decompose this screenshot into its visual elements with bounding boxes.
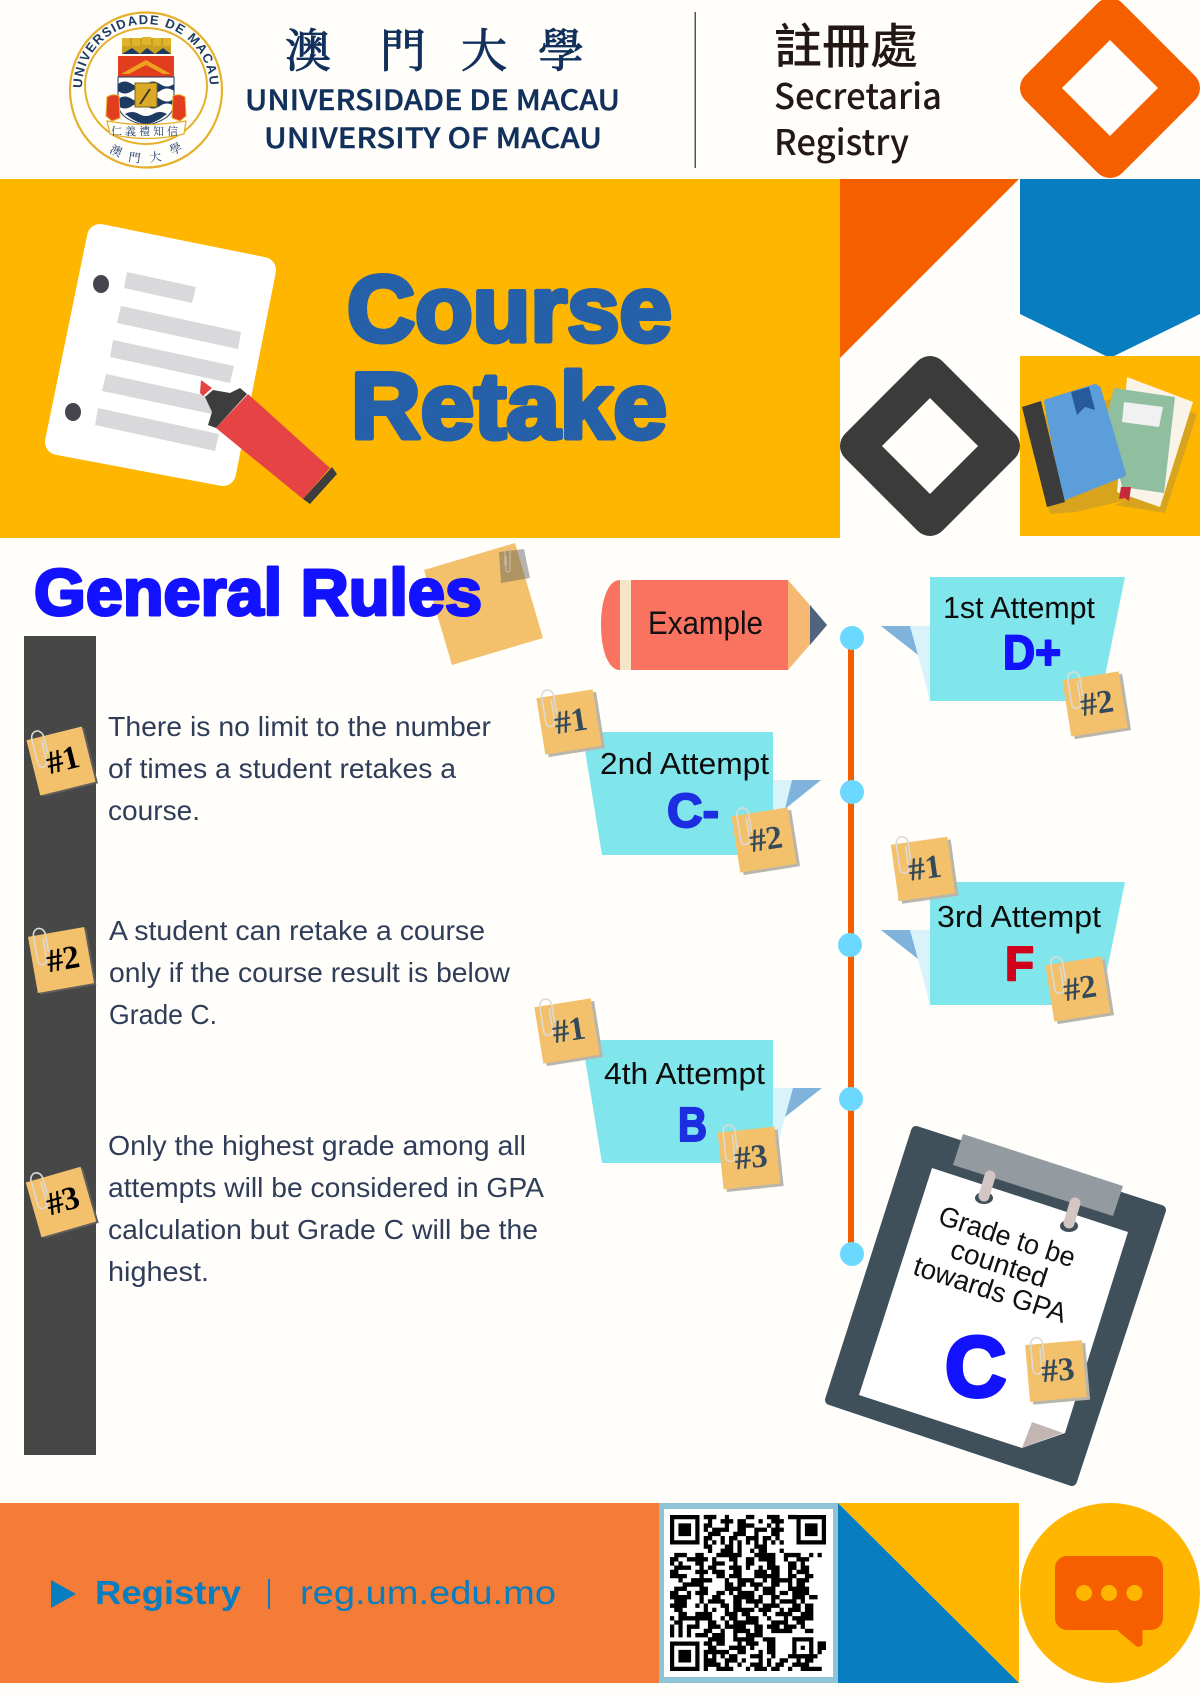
- university logo: 大: [148, 148, 162, 165]
- rule 2 text: [109, 915, 511, 1030]
- university logo: UNIVERSIDADE DE MACAU: [73, 15, 219, 88]
- rule 2 text: A student can retake a course: [109, 915, 485, 946]
- note #1: #1: [906, 849, 944, 889]
- registry chinese: 註冊處: [774, 7, 918, 77]
- registry label: Registry: [95, 1574, 242, 1611]
- document illustration: [58, 237, 337, 504]
- icon: highlighter marker: [200, 380, 337, 504]
- rule 3 text: [108, 1130, 544, 1287]
- card: 2nd attempt: 2nd Attempt: [600, 746, 769, 781]
- card: 1st attempt: D+: [1003, 627, 1061, 680]
- panel: general rules: [24, 543, 544, 1455]
- note #2: [1061, 665, 1131, 740]
- clipboard text: [910, 1200, 1079, 1329]
- footer: [0, 1503, 1200, 1683]
- icon: play arrow: [51, 1580, 76, 1608]
- note #3: [1025, 1333, 1090, 1405]
- university name english: UNIVERSITY OF MACAU: [264, 117, 602, 157]
- university name portuguese: UNIVERSIDADE DE MACAU: [245, 79, 620, 119]
- hero banner: [0, 179, 840, 538]
- note #1: [890, 830, 959, 904]
- rule 1 text: of times a student retakes a: [108, 753, 456, 784]
- card: 1st attempt: 1st Attempt: [943, 590, 1095, 625]
- panel: example timeline: [533, 577, 1161, 1481]
- card: 3rd attempt: 3rd Attempt: [937, 899, 1101, 934]
- title: Course Retake: Course: [347, 256, 672, 361]
- card: 3rd attempt: [881, 830, 1125, 1025]
- rule 2 text: only if the course result is below: [109, 957, 511, 988]
- card: 4th attempt: B: [678, 1099, 707, 1152]
- pencil: example: [601, 580, 827, 670]
- orange diamond: [1037, 15, 1183, 161]
- rule 1 note: [25, 720, 98, 797]
- university logo: 門: [128, 150, 141, 166]
- icon: chat bubble: [1020, 1503, 1200, 1683]
- card: 2nd attempt: C-: [667, 785, 719, 838]
- note #1: [533, 992, 603, 1067]
- note #2: #2: [1061, 968, 1099, 1009]
- title: Course Retake: Retake: [351, 353, 667, 458]
- secretaria: Secretaria: [774, 69, 942, 120]
- rule 3 text: calculation but Grade C will be the: [108, 1214, 538, 1245]
- note #1: #1: [552, 701, 590, 742]
- rule 3 text: highest.: [108, 1256, 209, 1287]
- footer orange bar: [0, 1503, 659, 1683]
- header: [68, 0, 1200, 178]
- note #2: #2: [747, 819, 785, 860]
- note #2: #2: [1078, 683, 1116, 724]
- rule 3 note: #3: [42, 1180, 84, 1223]
- university logo: 澳: [108, 142, 125, 160]
- card: 3rd attempt: F: [1005, 938, 1034, 991]
- timeline dots: [838, 626, 864, 1266]
- rule 2 text: Grade C.: [109, 999, 217, 1030]
- orange triangle: [840, 179, 1019, 358]
- pencil: example: Example: [648, 605, 763, 641]
- heading: General Rules: General Rules: [34, 555, 482, 629]
- university logo: 仁義禮知信: [111, 124, 181, 138]
- clipboard: [830, 1131, 1161, 1481]
- note #3: #3: [1040, 1351, 1076, 1390]
- books tile: [1020, 356, 1200, 536]
- rule 1 text: There is no limit to the number: [108, 711, 491, 742]
- note #1: [535, 683, 605, 758]
- sticky note large: [424, 543, 543, 665]
- qr code: [659, 1503, 838, 1683]
- rule 3 text: Only the highest grade among all: [108, 1130, 526, 1161]
- rule 1 text: [108, 711, 491, 826]
- clipboard text: towards GPA: [910, 1250, 1071, 1329]
- triangles tile: [838, 1503, 1019, 1683]
- timeline line: [848, 640, 854, 1254]
- rule 1 note: #1: [43, 739, 83, 782]
- note #1: #1: [550, 1010, 588, 1051]
- rule 2 note: #2: [44, 939, 82, 980]
- divider: [694, 12, 696, 168]
- rule 2 note: [27, 920, 96, 995]
- note #2: [730, 801, 800, 876]
- card: 4th attempt: [533, 992, 822, 1192]
- university name chinese: 澳門大學: [285, 26, 584, 77]
- website url: reg.um.edu.mo: [300, 1574, 556, 1611]
- card: 2nd attempt: [535, 683, 821, 876]
- note #2: [1044, 950, 1114, 1025]
- note #3: [717, 1120, 784, 1192]
- university logo: [68, 11, 224, 169]
- separator: [268, 1579, 270, 1609]
- university logo: 學: [167, 140, 184, 158]
- clipboard text: counted: [947, 1233, 1051, 1294]
- dark diamond: [857, 373, 1003, 519]
- card: 1st attempt: [881, 577, 1131, 740]
- rule 3 text: attempts will be considered in GPA: [108, 1172, 544, 1203]
- note #3: #3: [733, 1138, 769, 1177]
- registry: Registry: [774, 115, 909, 166]
- rule 3 note: [24, 1160, 99, 1239]
- blue pennant: [1020, 179, 1200, 358]
- geometric panel: [840, 179, 1200, 536]
- rule 1 text: course.: [108, 795, 200, 826]
- card: 4th attempt: 4th Attempt: [604, 1056, 765, 1091]
- final grade C: C: [945, 1320, 1006, 1415]
- title: Course Retake: [347, 256, 672, 458]
- clipboard text: Grade to be: [935, 1200, 1079, 1273]
- dark column: [24, 636, 96, 1455]
